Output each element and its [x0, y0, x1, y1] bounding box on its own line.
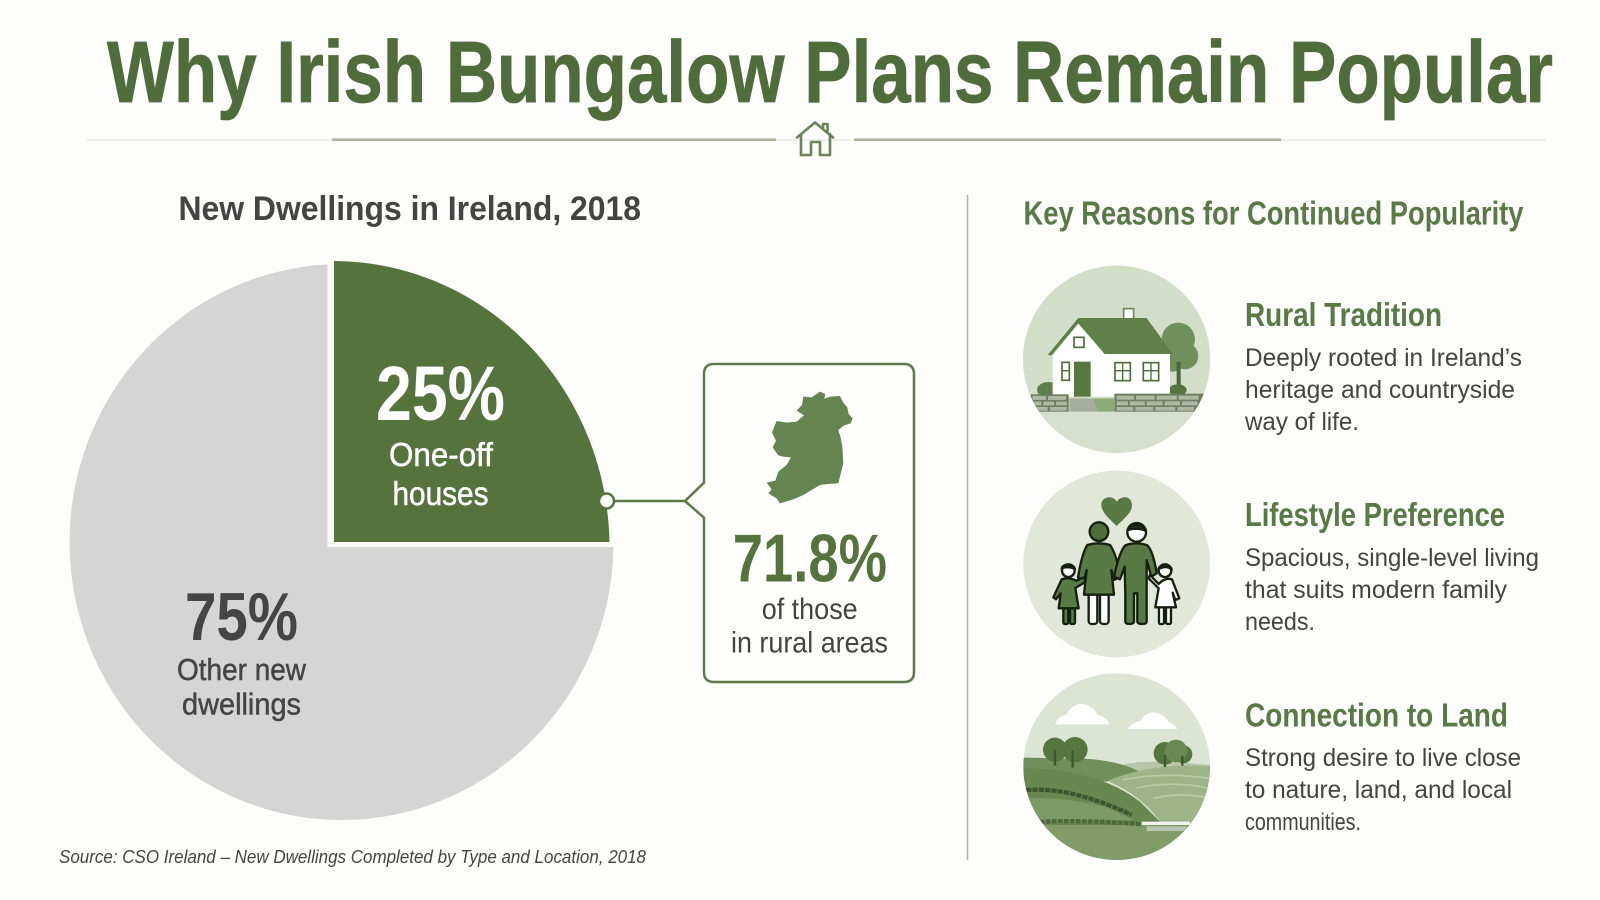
callout box	[685, 364, 914, 682]
text: rural tradition: Rural Tradition	[1245, 296, 1442, 333]
text: connection to land	[1245, 696, 1521, 836]
icon: countryside landscape	[1023, 673, 1210, 862]
callout caption: in rural areas	[731, 627, 888, 660]
icon: house divider	[797, 122, 833, 155]
label: 75% other new dwellings: dwellings	[182, 686, 301, 722]
stat: 71.8%: 71.8%	[733, 521, 887, 597]
label: 25% one-off houses: One-off	[389, 436, 494, 473]
text: lifestyle preference: Spacious, single-level living	[1245, 544, 1539, 572]
label: 25% one-off houses	[376, 351, 505, 512]
panel: key reasons	[1023, 194, 1539, 862]
icon: map of Ireland	[767, 392, 853, 503]
source note: Source: CSO Ireland – New Dwellings Completed by Type and Location, 2018	[59, 846, 647, 867]
chart heading: New Dwellings in Ireland, 2018	[178, 190, 641, 228]
text: connection to land: to nature, land, and local	[1245, 776, 1512, 804]
text: lifestyle preference: Lifestyle Preference	[1245, 496, 1505, 533]
text: lifestyle preference	[1245, 496, 1539, 636]
text: connection to land: Strong desire to live close	[1245, 744, 1521, 772]
text: rural tradition: way of life.	[1244, 408, 1359, 436]
text: rural tradition: heritage and countryside	[1245, 376, 1515, 404]
text: rural tradition	[1244, 296, 1522, 436]
icon: rural cottage	[1023, 266, 1210, 455]
label: 25% one-off houses: 25%	[376, 351, 505, 437]
pie chart	[70, 261, 614, 820]
panel: dwellings chart	[59, 190, 914, 867]
callout caption: of those	[762, 593, 858, 626]
text: rural tradition: Deeply rooted in Ireland’s	[1245, 344, 1522, 372]
label: 75% other new dwellings	[177, 579, 307, 722]
label: 75% other new dwellings: Other new	[177, 652, 307, 687]
pie slice: other dwellings 75%	[70, 264, 614, 820]
callout: rural share	[685, 364, 914, 682]
text: lifestyle preference: that suits modern family	[1245, 576, 1507, 604]
icon: family	[1023, 471, 1210, 657]
text: connection to land: Connection to Land	[1245, 696, 1508, 734]
connector from slice to callout	[599, 494, 685, 508]
label: 75% other new dwellings: 75%	[185, 579, 298, 655]
text: connection to land: communities.	[1245, 809, 1361, 836]
callout caption	[731, 593, 888, 660]
label: 25% one-off houses: houses	[392, 475, 488, 512]
text: lifestyle preference: needs.	[1245, 608, 1315, 636]
pie slice: one-off houses 25%	[334, 261, 610, 542]
